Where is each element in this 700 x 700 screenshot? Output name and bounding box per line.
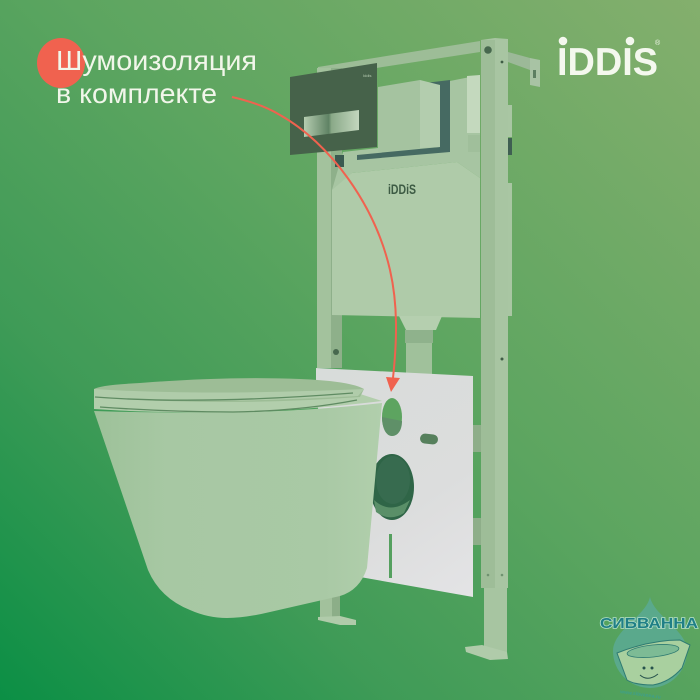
left post [317, 68, 342, 368]
side clips [508, 105, 512, 316]
brand logo: ® [655, 39, 661, 47]
cistern mechanism [332, 75, 480, 190]
water drop [613, 597, 687, 688]
bathtub [617, 640, 690, 685]
arrow [232, 97, 400, 392]
plate mark: Iddis [363, 73, 371, 78]
toilet bowl [94, 403, 382, 618]
dark bracket [357, 80, 450, 160]
heading: Шумоизоляция [56, 45, 257, 76]
cistern [332, 162, 480, 318]
flush plate [290, 63, 377, 155]
clip [468, 135, 480, 152]
upper hole [382, 398, 402, 436]
retailer logo [600, 597, 698, 700]
brand logo: IDDIS [557, 41, 658, 84]
lid front edge [94, 389, 364, 401]
service box [378, 80, 420, 152]
mechanism body [332, 75, 480, 190]
cistern logo: iDDiS [388, 181, 416, 197]
drain pipe [399, 316, 442, 375]
small slot [420, 433, 438, 445]
callout dot [37, 38, 85, 88]
toilet lid [94, 378, 364, 402]
toilet seat [94, 393, 382, 412]
dark plate mount [335, 155, 344, 167]
left foot [318, 590, 356, 625]
heading line two: в комплекте [56, 78, 217, 109]
right post [481, 38, 508, 652]
wall-hung toilet [94, 378, 382, 618]
upper body panel [467, 75, 480, 133]
right foot [465, 645, 508, 660]
wall bracket [508, 52, 540, 87]
top crossbar [318, 41, 480, 77]
side brackets [473, 425, 482, 545]
soundproofing panel [316, 368, 473, 597]
installation frame [317, 38, 540, 660]
vertical slit [389, 534, 392, 578]
flush button [304, 110, 359, 137]
large hole [370, 454, 414, 520]
retailer name: СИБВАННА [600, 615, 698, 632]
